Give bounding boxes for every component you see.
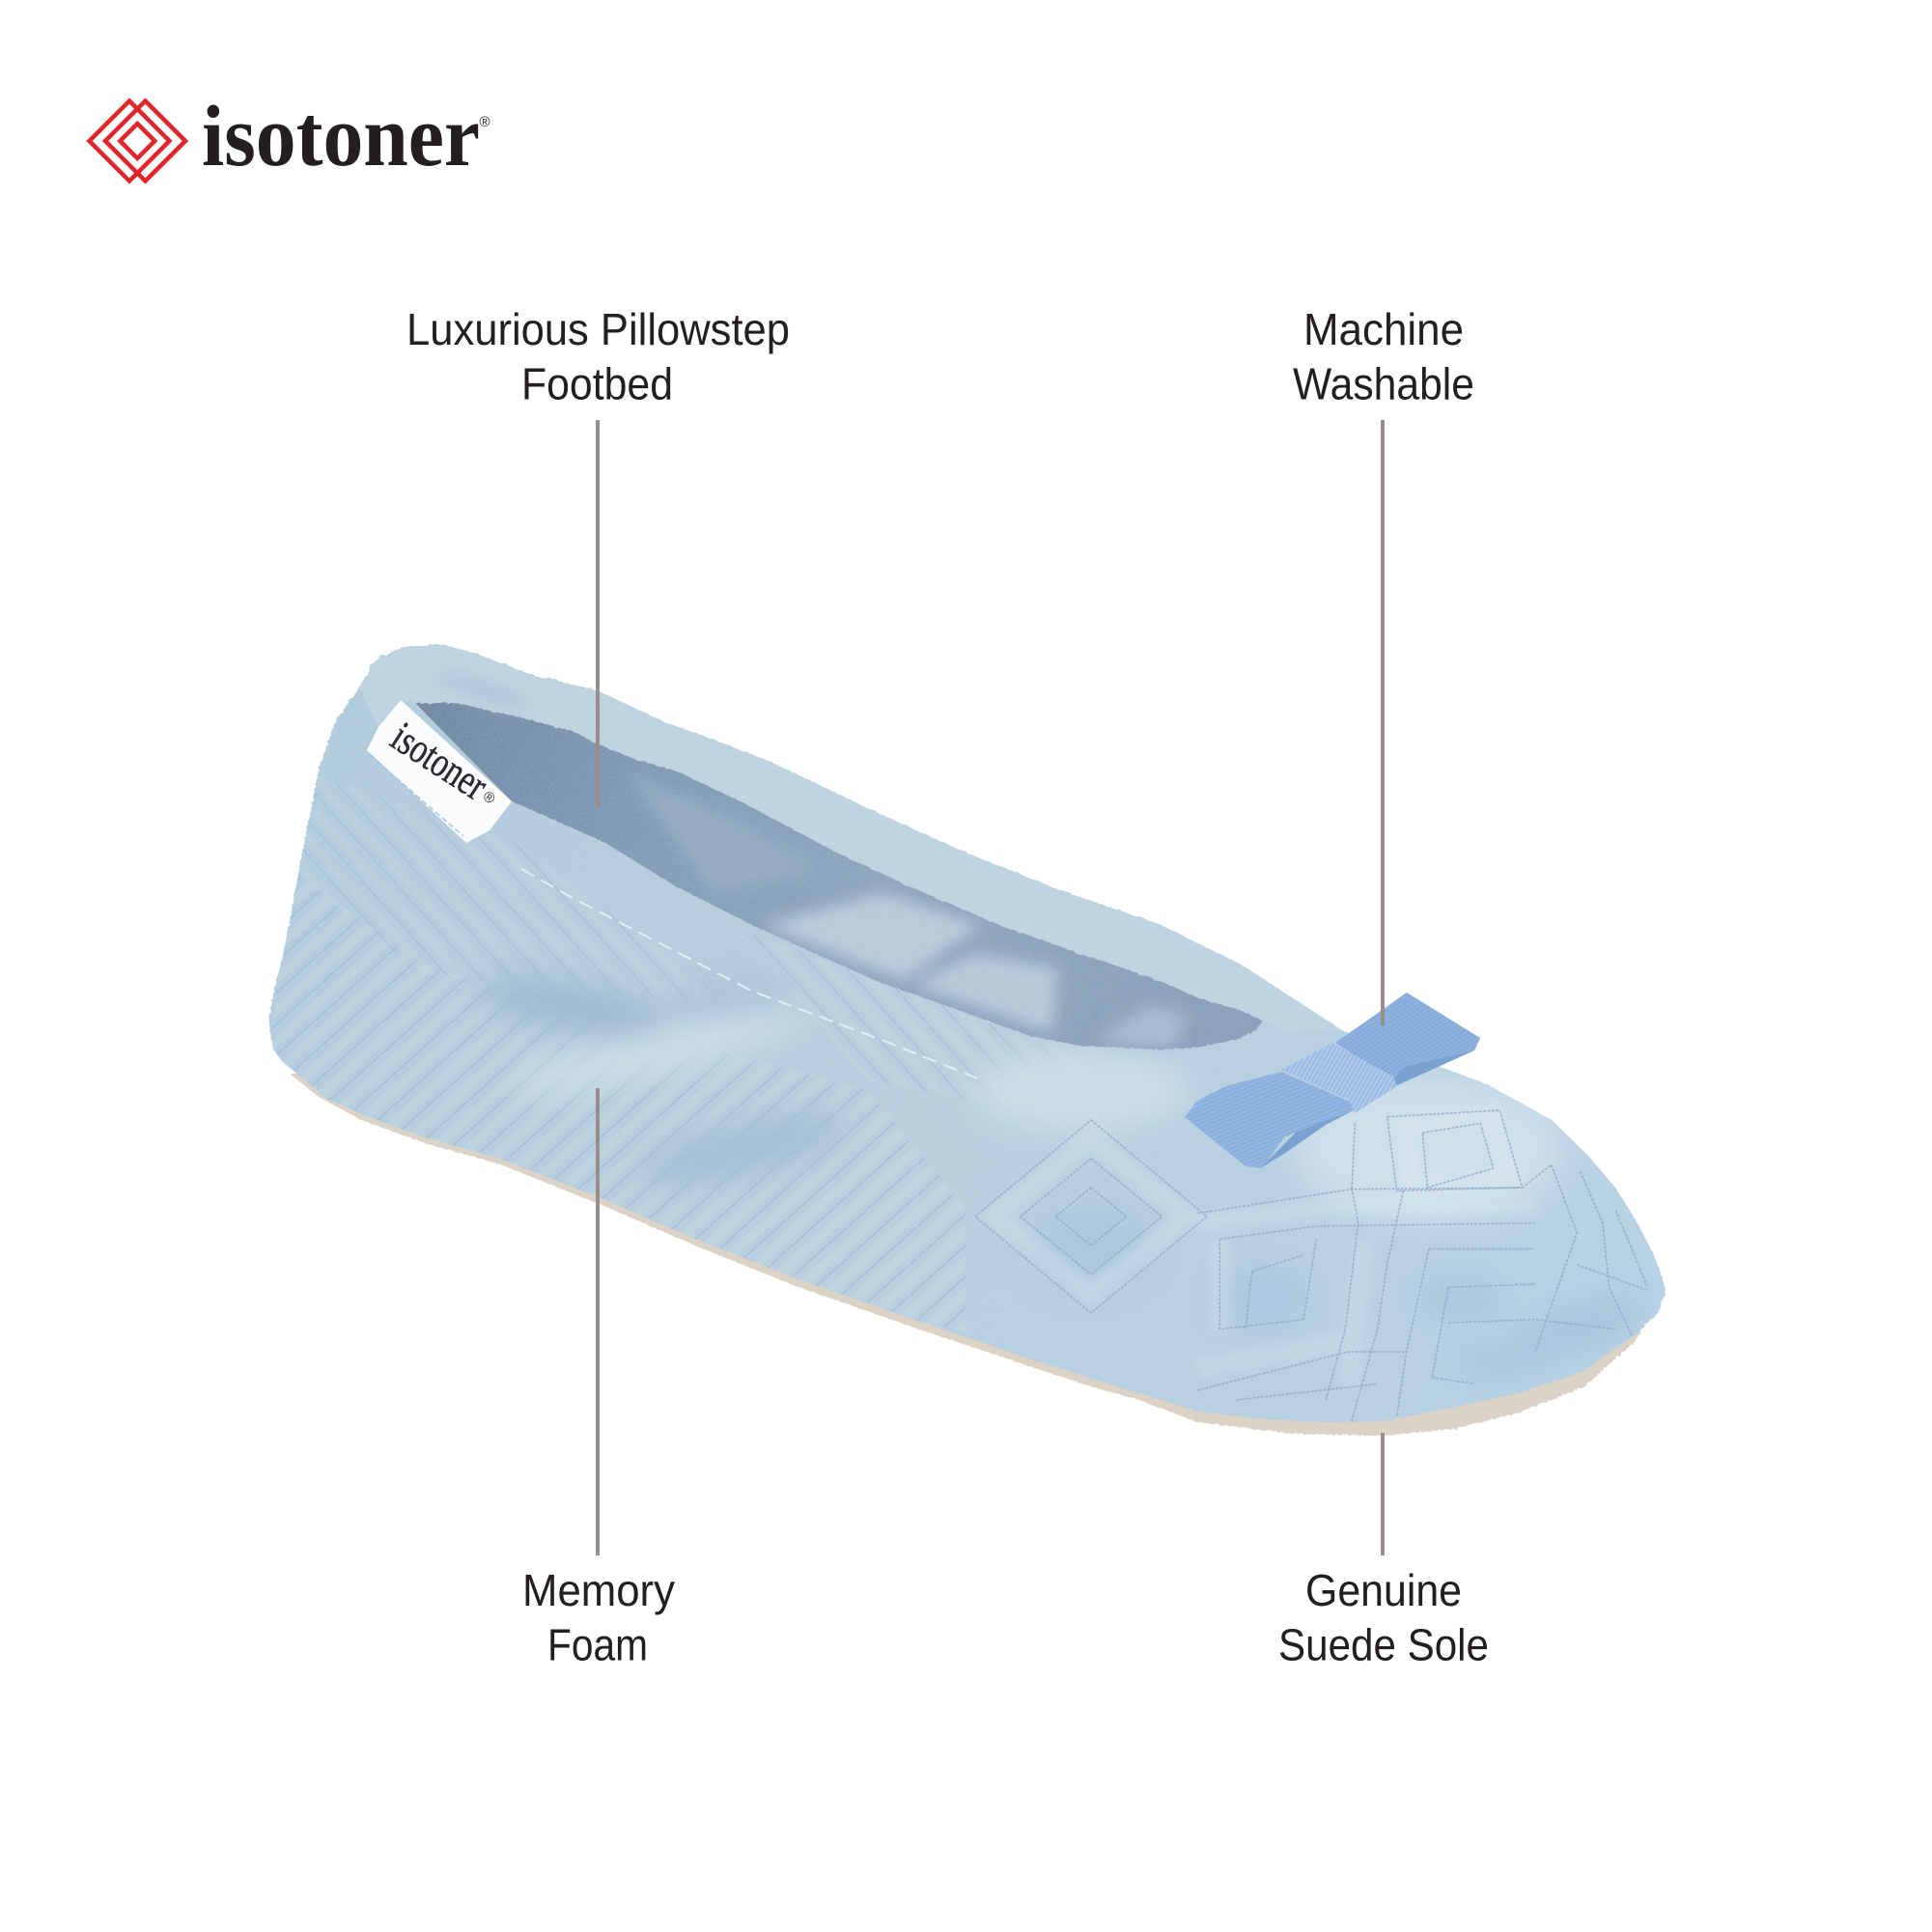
knit upper body	[268, 645, 1666, 1422]
collar shadow near heel	[434, 666, 532, 714]
center band	[1281, 1043, 1397, 1113]
label: Machine Washable: Machine	[1303, 304, 1464, 354]
leader line: machine washable	[1381, 420, 1385, 1025]
footbed pillow highlights	[628, 772, 1188, 1048]
right loop	[1335, 993, 1480, 1086]
label: Machine Washable	[1293, 304, 1474, 409]
sewn label with brand name: ®	[480, 788, 498, 807]
logo: isotoner	[89, 89, 490, 184]
fabric grain overlay	[270, 678, 1664, 1385]
label: Machine Washable: Washable	[1293, 359, 1474, 409]
logo wordmark: isotoner	[202, 89, 480, 184]
toe quilted diamonds	[975, 1110, 1648, 1432]
left loop	[1185, 1072, 1355, 1168]
label: Luxurious Pillowstep Footbed: Luxurious Pillowstep	[406, 304, 790, 354]
ribbon bow	[1185, 993, 1480, 1168]
label: Memory Foam: Foam	[547, 1620, 648, 1670]
label: Genuine Suede Sole: Suede Sole	[1278, 1620, 1489, 1670]
logo wordmark: ®	[479, 114, 490, 130]
sewn label with brand name	[367, 700, 512, 843]
inner footbed opening	[415, 703, 1262, 1050]
slipper product illustration	[268, 643, 1666, 1437]
label: Genuine Suede Sole	[1278, 1565, 1489, 1670]
knit shading and diamond pattern	[267, 772, 1649, 1432]
leader line: memory foam	[596, 1088, 600, 1555]
sewn label with brand name: isotoner	[383, 713, 496, 809]
stitch line	[521, 869, 985, 1081]
suede sole	[290, 1062, 1651, 1436]
label: Memory Foam	[522, 1565, 675, 1670]
leader line: footbed	[596, 420, 600, 807]
label: Memory Foam: Memory	[522, 1565, 675, 1615]
fluffy collar	[360, 645, 1342, 1031]
label: Luxurious Pillowstep Footbed: Footbed	[521, 359, 673, 409]
icon: red nested diamonds	[89, 100, 185, 182]
label: Luxurious Pillowstep Footbed	[406, 304, 790, 409]
label: Genuine Suede Sole: Genuine	[1305, 1565, 1462, 1615]
leader line: suede sole	[1381, 1433, 1385, 1555]
